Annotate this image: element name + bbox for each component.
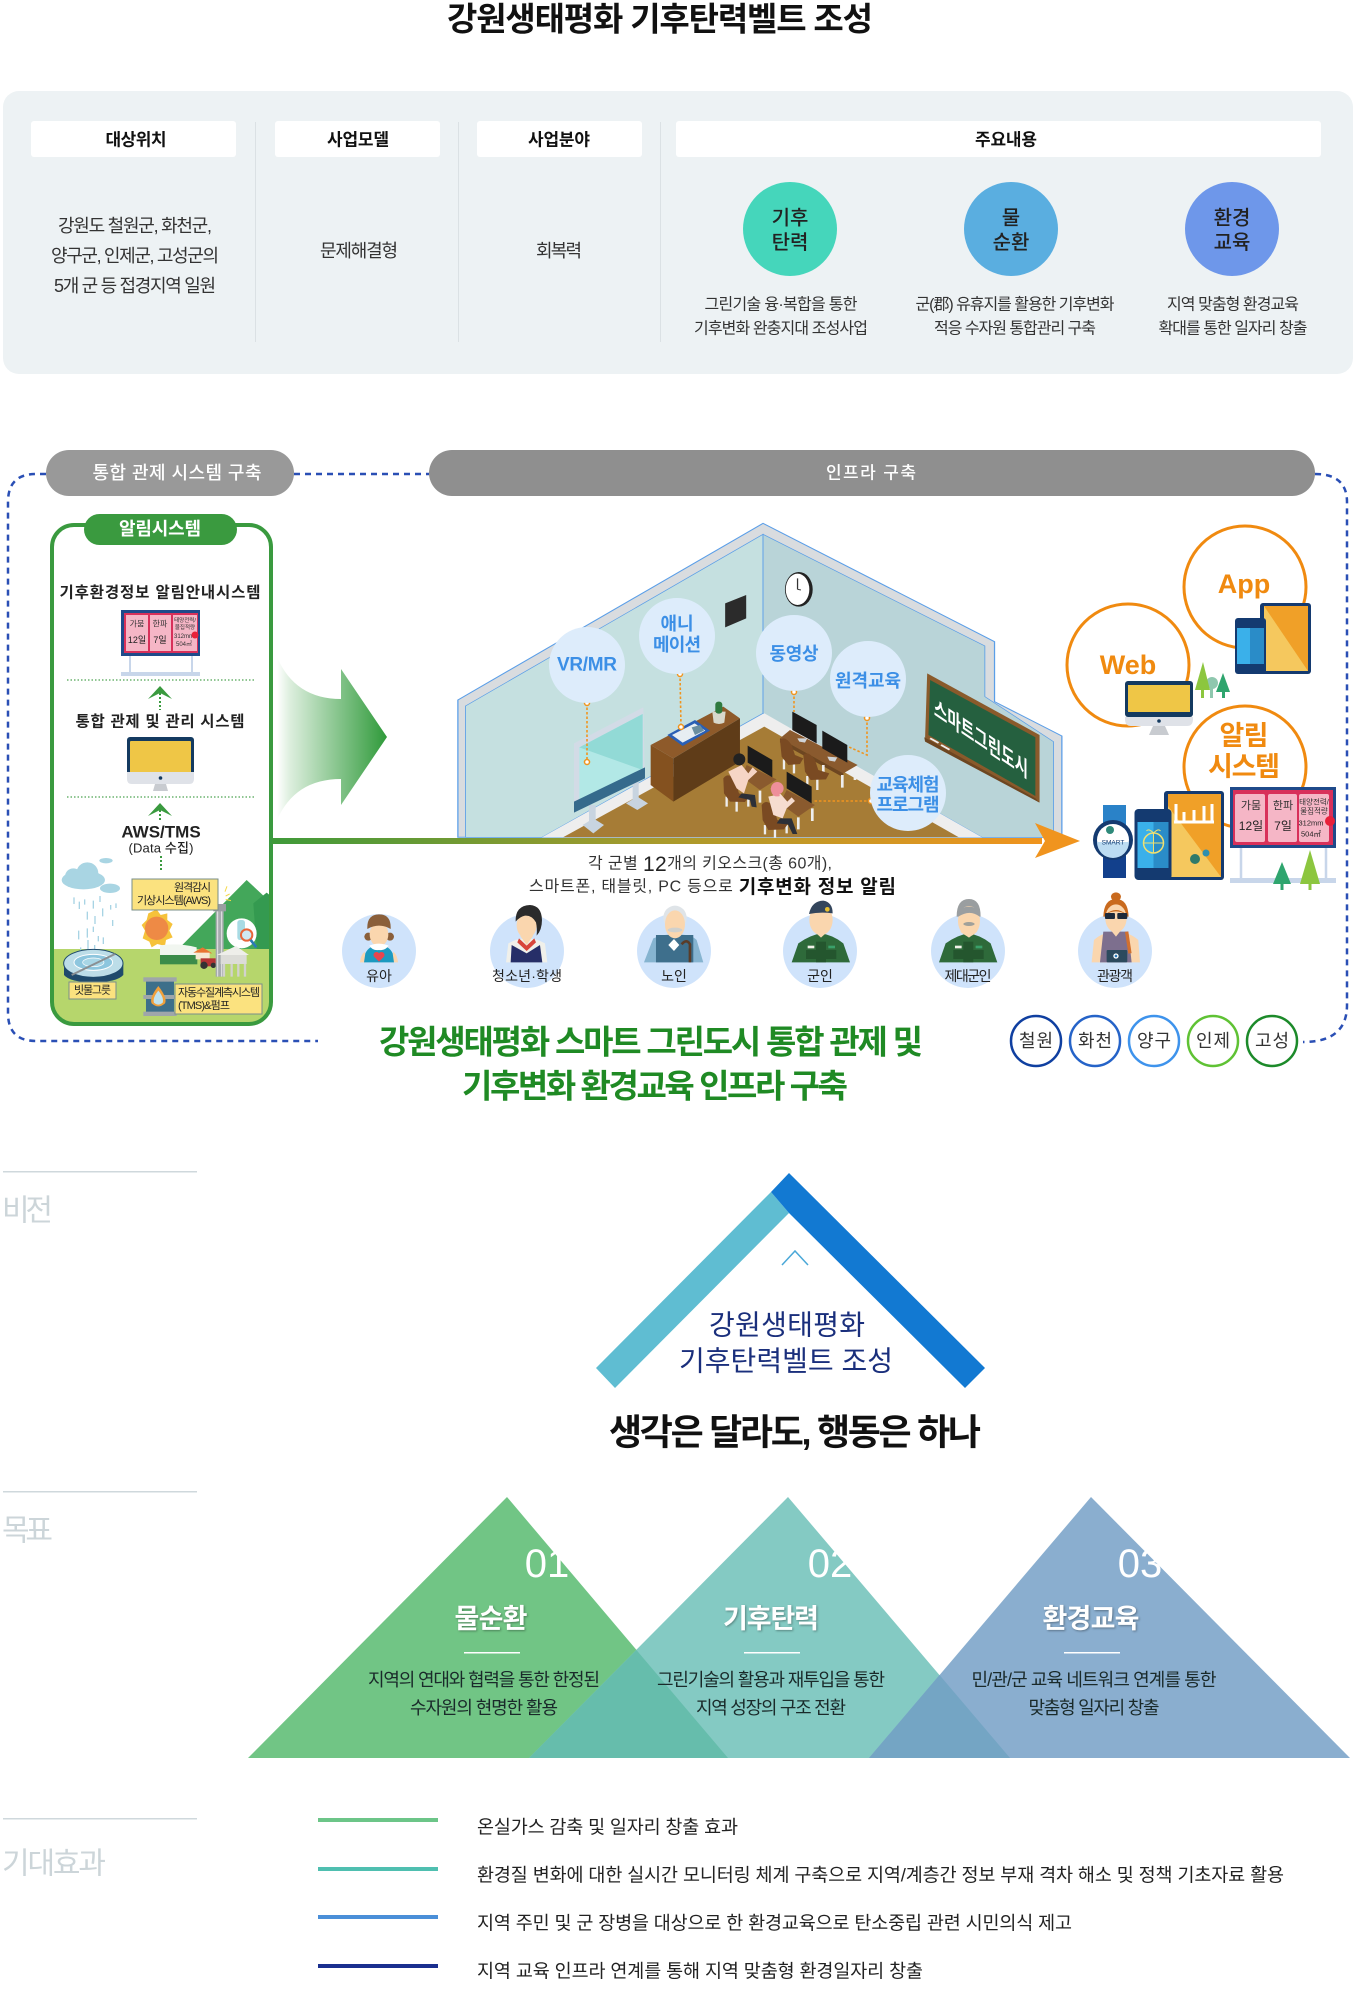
- label: TMS and pump: [175, 984, 262, 1014]
- goal 2: climate resilience: [657, 1542, 885, 1718]
- label: rain barrel: [69, 982, 116, 999]
- column: business model: 문제해결형: [320, 241, 398, 261]
- column: business field: 회복력: [536, 241, 582, 261]
- icon: trees bottom: [1273, 850, 1320, 890]
- item: climate resilience: [694, 182, 868, 338]
- icon: large kiosk: 312mm: [1298, 818, 1324, 828]
- icon: kiosk: 7일: [153, 635, 167, 645]
- arrow: large green gradient: [277, 657, 387, 820]
- goal 1: water circulation: 물순환: [454, 1604, 528, 1634]
- goal 1: water circulation: 지역의 연대와 협력을 통한 한정된: [368, 1670, 600, 1690]
- person 2: [762, 782, 797, 838]
- panel: alert system: [52, 514, 272, 1024]
- panel: project overview: [3, 91, 1353, 374]
- bubble: experience program: [870, 755, 946, 831]
- badge: Yanggu: [1129, 1016, 1179, 1066]
- badge: Cheorwon: [1011, 1016, 1061, 1066]
- column: target location: 양구군, 인제군, 고성군의: [51, 246, 219, 266]
- goal 1: water circulation: [368, 1542, 600, 1718]
- goal 1: water circulation: 수자원의 현명한 활용: [410, 1698, 558, 1718]
- bubble: VR/MR: VR/MR: [557, 654, 617, 676]
- bubble: VR/MR: [549, 627, 625, 703]
- audience: soldier: [783, 901, 857, 988]
- icon: smart watch: SMART: [1102, 840, 1124, 846]
- figure: [939, 899, 997, 962]
- icon: smart watch: [1093, 805, 1133, 878]
- item: climate resilience: 탄력: [772, 231, 808, 254]
- icon: kiosk: 태양전력/: [174, 616, 196, 624]
- badge: Hwacheon: [1070, 1016, 1120, 1066]
- column: business field: [477, 121, 642, 261]
- goal 3: environmental education: 환경교육: [1042, 1604, 1140, 1634]
- audience: tourist: [1078, 892, 1152, 988]
- icon: phone with globe: [1134, 809, 1172, 880]
- section label: vision: 비전: [2, 1194, 53, 1228]
- text: kiosk notice: [529, 852, 896, 898]
- label: climate info system: 기후환경정보 알림안내시스템: [60, 584, 260, 602]
- column: target location: 강원도 철원군, 화천군,: [58, 216, 212, 236]
- audience: soldier: 군인: [807, 968, 833, 984]
- column: business model: [275, 121, 440, 261]
- item: water circulation: [916, 182, 1115, 338]
- icon: monitor: [127, 737, 194, 791]
- label: rain barrel: 빗물그릇: [74, 984, 111, 996]
- icon: kiosk: 12일: [128, 635, 146, 645]
- item: water circulation: 물: [1002, 208, 1020, 230]
- arrow: long gradient: [272, 823, 1080, 858]
- illustration: classroom: [458, 523, 1062, 838]
- bubble: animation: [639, 598, 715, 674]
- bubble: video: [756, 615, 832, 691]
- effect 4: 지역 교육 인프라 연계를 통해 지역 맞춤형 환경일자리 창출: [477, 1960, 923, 1982]
- figure: [360, 914, 398, 962]
- badge: Goseong: [1247, 1016, 1297, 1066]
- effect 3: 지역 주민 및 군 장병을 대상으로 한 환경교육으로 탄소중립 관련 시민의식 제고: [477, 1912, 1072, 1934]
- icon: tablet with chart: [1164, 791, 1224, 880]
- label: data collection: (Data 수집): [128, 840, 194, 856]
- effect 1: [318, 1816, 738, 1838]
- circle: alert system: 시스템: [1208, 752, 1280, 782]
- effect 2: 환경질 변화에 대한 실시간 모니터링 체계 구축으로 지역/계층간 정보 부재 격차 해소 및 정책 기초자료 활용: [477, 1864, 1284, 1886]
- item: climate resilience: 기후: [772, 206, 808, 230]
- vision emblem: 기후탄력벨트 조성: [679, 1346, 893, 1376]
- audience: infant: 유아: [366, 968, 392, 984]
- audience: tourist: 관광객: [1097, 968, 1133, 984]
- bubble: animation: 메이션: [653, 635, 701, 655]
- heading: green tagline: 강원생태평화 스마트 그린도시 통합 관제 및: [379, 1024, 923, 1060]
- text: kiosk notice: 스마트폰, 태블릿, PC 등으로 기후변화 정보 알림: [529, 876, 896, 898]
- person 1: [723, 753, 757, 812]
- bubble: remote education: 원격교육: [835, 671, 901, 691]
- icon: large kiosk: 504㎡: [1301, 830, 1322, 838]
- goal 2: climate resilience: 02: [808, 1542, 852, 1586]
- speaker: [725, 595, 746, 627]
- circle: alert system: [1184, 706, 1306, 828]
- bubble: experience program: 프로그램: [876, 795, 940, 815]
- pill: infrastructure: 인프라 구축: [826, 464, 916, 482]
- icon: desktop monitor: [1125, 681, 1193, 735]
- circle: Web: Web: [1100, 650, 1156, 680]
- icon: large kiosk: 태양전력/: [1299, 796, 1330, 806]
- audience: elderly: 노인: [661, 968, 687, 984]
- badge: Yanggu: 양구: [1137, 1031, 1171, 1051]
- effects list: [318, 1816, 1284, 1982]
- icon: large kiosk: 물집적량: [1300, 806, 1328, 816]
- icon: kiosk: 504㎡: [176, 640, 192, 648]
- illustration: field monitoring scene: [52, 858, 272, 1023]
- column: business model: 사업모델: [327, 130, 389, 150]
- icon: tablet and phone: [1235, 603, 1311, 674]
- pill: infrastructure: [429, 450, 1315, 496]
- clock: [785, 572, 813, 607]
- vision slogan: 생각은 달라도, 행동은 하나: [609, 1412, 981, 1452]
- item: environmental education: [1158, 182, 1308, 338]
- figure: [1092, 892, 1140, 962]
- label: TMS and pump: (TMS)&펌프: [178, 999, 230, 1012]
- arrow: up 2: [148, 803, 172, 822]
- column: main content: 주요내용: [975, 130, 1037, 150]
- blackboard: [925, 673, 1040, 803]
- arrow: up 1: [148, 686, 172, 710]
- item: climate resilience: 기후변화 완충지대 조성사업: [694, 320, 868, 338]
- circle: Web: [1067, 604, 1193, 735]
- item: environmental education: 확대를 통한 일자리 창출: [1158, 320, 1308, 338]
- front desks: [742, 765, 777, 790]
- label: AWS: 원격감시: [174, 881, 211, 894]
- label: TMS and pump: 자동수질계측시스템: [178, 986, 260, 999]
- audience: veteran: [931, 899, 1005, 988]
- icon: large kiosk: 7일: [1274, 819, 1292, 833]
- goal 2: climate resilience: 그린기술의 활용과 재투입을 통한: [657, 1670, 885, 1690]
- dashed boundary: [8, 474, 1347, 1042]
- badge: Hwacheon: 화천: [1078, 1031, 1112, 1051]
- bubble: experience program: 교육체험: [876, 775, 940, 795]
- audience: elderly: [637, 906, 711, 988]
- vision emblem: [596, 1173, 985, 1388]
- icon: kiosk: 가뭄: [130, 620, 144, 628]
- badge: Goseong: 고성: [1255, 1031, 1289, 1051]
- audience: infant: [342, 914, 416, 988]
- circle: App: [1184, 526, 1311, 674]
- icon: large kiosk: 12일: [1239, 819, 1263, 833]
- label: AWS: 기상시스템(AWS): [137, 894, 211, 907]
- goal 3: environmental education: 민/관/군 교육 네트워크 연계를 통한: [972, 1670, 1216, 1690]
- item: water circulation: 군(郡) 유휴지를 활용한 기후변화: [916, 296, 1115, 314]
- section label: goals: 목표: [2, 1514, 53, 1548]
- teacher desk: [651, 707, 740, 758]
- floor: [542, 713, 982, 837]
- bubble: animation: 애니: [660, 614, 694, 634]
- back desks: [780, 730, 858, 773]
- furniture and people: [574, 702, 858, 838]
- blackboard text: 스마트그린도시: [934, 695, 1028, 784]
- goal 2: climate resilience: 기후탄력: [723, 1604, 819, 1634]
- frame: [52, 525, 271, 1024]
- item: environmental education: 교육: [1214, 232, 1250, 254]
- badge: Cheorwon: 철원: [1019, 1031, 1053, 1051]
- audience: veteran: 제대군인: [944, 968, 992, 984]
- figure: [644, 906, 703, 962]
- goal 1: water circulation: 01: [525, 1542, 569, 1586]
- figure: [506, 905, 547, 962]
- figure: [792, 901, 850, 962]
- column: main content: [676, 121, 1321, 338]
- back chairs: [784, 759, 817, 790]
- badge: Inje: 인제: [1196, 1031, 1230, 1051]
- column: target location: 대상위치: [106, 130, 166, 150]
- item: environmental education: 지역 맞춤형 환경교육: [1167, 296, 1299, 314]
- header pill: [84, 514, 237, 545]
- section label: expected effects: 기대효과: [2, 1848, 106, 1880]
- title: 강원생태평화 기후탄력벨트 조성: [447, 0, 873, 38]
- bubble: video: 동영상: [770, 644, 819, 664]
- region badges: [1011, 1016, 1297, 1066]
- pill: integrated control system: [46, 450, 294, 496]
- icon: kiosk: 물집적량: [175, 624, 195, 631]
- icon: large kiosk: 한파: [1273, 799, 1293, 812]
- heading: green tagline: 기후변화 환경교육 인프라 구축: [462, 1068, 848, 1104]
- badge: Inje: [1188, 1016, 1238, 1066]
- circle: App: App: [1218, 569, 1270, 599]
- goal 2: climate resilience: 지역 성장의 구조 전환: [696, 1698, 846, 1718]
- goal 3: environmental education: [972, 1542, 1216, 1718]
- walls: [458, 523, 1062, 837]
- whiteboard: [589, 805, 596, 825]
- icon: kiosk: 한파: [153, 620, 168, 628]
- effect 1: 온실가스 감축 및 일자리 창출 효과: [477, 1816, 738, 1838]
- vision emblem: 강원생태평화: [709, 1310, 865, 1340]
- circle: alert system: 알림: [1220, 721, 1268, 751]
- audience: youth and students: 청소년·학생: [492, 968, 562, 984]
- label: AWS: [132, 879, 218, 910]
- column: target location: 5개 군 등 접경지역 일원: [54, 276, 216, 296]
- item: water circulation: 순환: [993, 231, 1029, 254]
- goal 3: environmental education: 맞춤형 일자리 창출: [1028, 1698, 1160, 1718]
- pill: integrated control system: 통합 관제 시스템 구축: [92, 463, 262, 483]
- item: water circulation: 적응 수자원 통합관리 구축: [934, 320, 1096, 338]
- goals triangles: [248, 1497, 1350, 1758]
- icon: large kiosk: 가뭄: [1241, 799, 1261, 812]
- header pill: 알림시스템: [119, 519, 201, 539]
- column: business field: 사업분야: [528, 130, 590, 150]
- audience: youth and students: [490, 905, 564, 988]
- item: climate resilience: 그린기술 융·복합을 통한: [704, 296, 858, 314]
- heading: green tagline: [379, 1024, 923, 1104]
- connectors: [587, 674, 871, 801]
- icon: kiosk: 312mm: [174, 634, 194, 640]
- column: target location: [31, 121, 236, 296]
- goal 3: environmental education: 03: [1118, 1542, 1162, 1586]
- label: control system: 통합 관제 및 관리 시스템: [76, 712, 244, 730]
- icon: kiosk: [121, 610, 200, 676]
- icon: trees top: [1195, 662, 1230, 698]
- text: kiosk notice: 각 군별 12개의 키오스크(총 60개),: [588, 852, 832, 876]
- icon: large kiosk: [1230, 787, 1336, 883]
- label: AWS/TMS: AWS/TMS: [121, 822, 201, 842]
- item: environmental education: 환경: [1214, 206, 1250, 230]
- bubble: remote education: [830, 641, 906, 717]
